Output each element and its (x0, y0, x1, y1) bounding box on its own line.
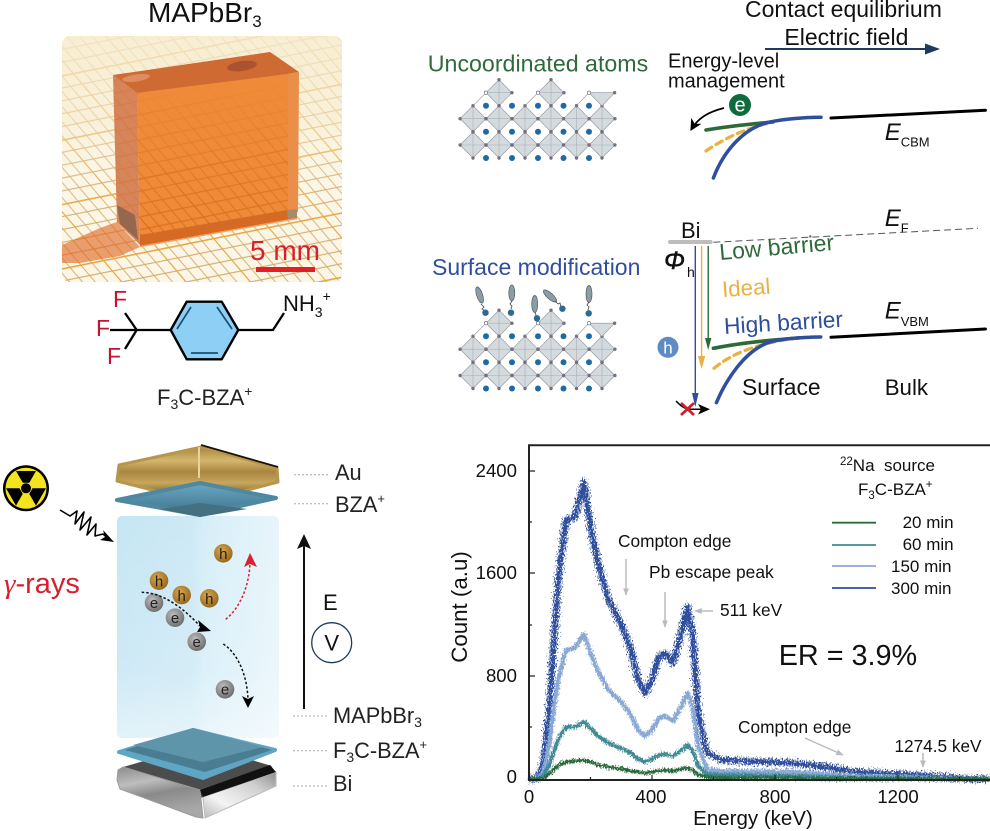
legend: C-BZA (875, 480, 926, 499)
label: Low barrier: Low barrier (718, 229, 835, 265)
lattice: uncoordinated surface (458, 78, 617, 161)
charge carriers: electrons (145, 593, 234, 699)
legend (832, 456, 954, 598)
spectrum 20 min (529, 760, 989, 779)
annotation: 511 keV: 511 keV (720, 600, 783, 620)
Au electrode layer (117, 445, 278, 492)
layer labels: 3 (346, 749, 354, 765)
legend: 20 min (903, 513, 954, 532)
legend: F (858, 480, 868, 499)
chemical structure: F3C-BZA+ (96, 286, 331, 369)
charge carriers: holes (150, 544, 233, 608)
chemical structure: F3C-BZA+: F (96, 315, 110, 341)
chemical structure: F3C-BZA+: F (113, 286, 127, 312)
label: E VBM: VBM (901, 314, 929, 329)
legend: 22 (840, 456, 853, 468)
charge carriers: electrons: e (193, 634, 201, 651)
ligands on surface (474, 285, 592, 321)
icon: hole h (658, 337, 678, 358)
label: Phi h: h (687, 264, 695, 280)
charge carriers: electrons: e (221, 682, 229, 698)
label: gamma-rays: γ-rays (4, 568, 80, 600)
annotation: second Compton edge: Compton edge (738, 717, 851, 737)
legend: 300 min (891, 579, 951, 598)
arrowheads for transport (197, 553, 257, 708)
label: Bulk: Bulk (885, 375, 929, 400)
arrow: Electric field: Electric field (784, 24, 908, 50)
lattice: modified surface (458, 308, 617, 392)
layer labels: Au (335, 460, 362, 485)
legend: 60 min (903, 535, 954, 554)
charge carriers: holes: h (155, 574, 163, 590)
barrier arrows (692, 246, 711, 407)
label: E F with Fermi level: F (901, 220, 909, 236)
y axis numbers: 2400 (476, 460, 517, 481)
legend: Na source (853, 456, 935, 475)
Bi contact: Bi (681, 218, 701, 243)
charge carriers: electrons: e (171, 610, 179, 627)
crystal photo on graph paper (62, 36, 342, 282)
arrow: Electric field (765, 24, 940, 54)
conduction band curves (706, 110, 985, 178)
spectrum 300 min (529, 482, 989, 779)
chemical structure: F3C-BZA+: 3 (315, 304, 323, 320)
label: E: E (323, 590, 338, 615)
chemical structure: F3C-BZA+: F (107, 343, 121, 369)
charge carriers: electrons: e (150, 595, 158, 612)
chemical structure: F3C-BZA+: NH (283, 291, 315, 316)
vertical E-field arrow (297, 534, 311, 709)
label: E CBM: E (885, 119, 901, 146)
label: F3C-BZA+: C-BZA (178, 385, 245, 410)
annotation: Compton edge: Compton edge (618, 531, 731, 551)
annotation: 1274.5 keV: 1274.5 keV (894, 736, 982, 756)
layer labels: BZA (335, 492, 377, 517)
legend: + (926, 479, 933, 491)
x axis numbers: 0 (524, 786, 534, 807)
label: E VBM: E (885, 297, 901, 324)
arrow: electron extraction (691, 108, 724, 130)
layer labels: 3 (414, 714, 422, 730)
Bi contact (668, 218, 713, 244)
label: Surface: Surface (742, 374, 821, 400)
MAPbBr3 crystal block (117, 516, 279, 738)
voltage source V: V (324, 630, 339, 656)
chart: pulse height spectrum (447, 445, 990, 830)
layer labels: Bi (333, 771, 352, 796)
heading: Surface modification: Surface modification (432, 254, 640, 280)
axis ticks (529, 471, 960, 780)
y axis numbers (476, 460, 517, 787)
icon: electron e (729, 94, 751, 116)
charge carriers: holes: h (219, 546, 227, 563)
annotation arrows (626, 559, 923, 767)
legend: 3 (868, 490, 875, 502)
energy resolution value: ER = 3.9% (779, 640, 917, 672)
y axis numbers: 800 (486, 665, 517, 686)
y axis numbers: 0 (507, 766, 517, 787)
blocked hole arrow with red cross (676, 401, 710, 415)
title: MAPbBr3: 3 (252, 12, 262, 31)
label: F3C-BZA+: 3 (170, 396, 178, 412)
y axis numbers: 1600 (476, 562, 517, 583)
y axis title: Count (a.u) (447, 551, 472, 663)
layer labels: MAPbBr (333, 703, 414, 728)
F3C-BZA+ layer (119, 728, 275, 778)
wavy arrow: gamma ray (60, 510, 114, 542)
layer labels (293, 460, 427, 796)
label: Energy-level management: Energy-level (668, 51, 779, 73)
label: Ideal: Ideal (721, 274, 771, 302)
heading: Uncoordinated atoms: Uncoordinated atoms (428, 51, 648, 77)
label: F3C-BZA+: F (157, 385, 170, 410)
layer labels: F (333, 738, 346, 763)
charge carriers: holes: h (205, 591, 213, 608)
layer labels: + (377, 491, 385, 506)
label: E F with Fermi level (713, 205, 978, 242)
label: Phi h: Φ (664, 247, 685, 275)
x axis title: Energy (keV) (693, 807, 813, 830)
Bi electrode layer (117, 745, 276, 818)
dotted transport arrows (142, 560, 250, 702)
icon: radiation symbol (3, 465, 49, 511)
BZA+ layer (117, 483, 276, 517)
spectrum 150 min (529, 634, 989, 779)
voltage source V (312, 623, 352, 663)
legend: 150 min (891, 557, 951, 576)
label: E CBM: CBM (901, 134, 930, 150)
x axis numbers: 1200 (877, 786, 919, 807)
label: E F with Fermi level: E (885, 205, 901, 232)
label: F3C-BZA+: + (244, 383, 252, 399)
layer labels: C-BZA (354, 738, 420, 763)
label: Energy-level management: management (668, 70, 785, 92)
x axis numbers (524, 786, 919, 807)
icon: electron e: e (734, 94, 746, 116)
icon: hole h: h (663, 338, 673, 358)
valence band curves (713, 329, 985, 403)
x axis numbers: 800 (759, 786, 791, 807)
scale bar: 5 mm: 5 mm (250, 235, 320, 266)
plot frame (529, 445, 990, 780)
chemical structure: F3C-BZA+: + (323, 288, 331, 304)
annotation: Pb escape peak: Pb escape peak (649, 562, 774, 582)
layer labels: + (420, 737, 427, 752)
spectrum 60 min (529, 722, 989, 779)
label: High barrier: High barrier (723, 306, 844, 339)
x axis numbers: 400 (635, 786, 667, 807)
charge carriers: holes: h (178, 588, 186, 605)
